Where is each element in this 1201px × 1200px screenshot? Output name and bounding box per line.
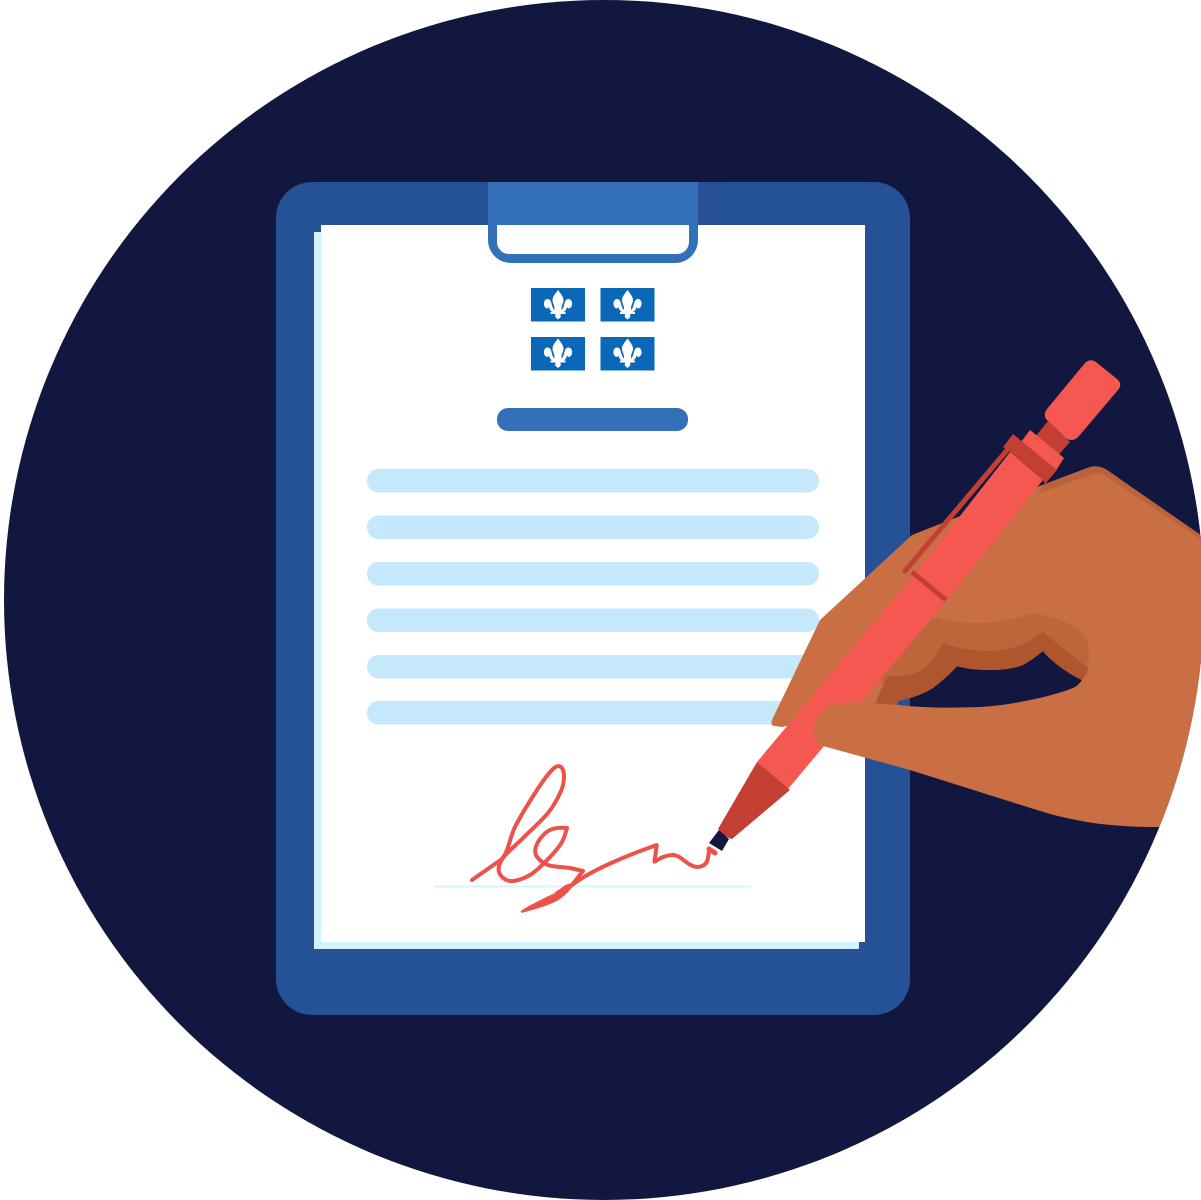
pen collar light band xyxy=(1018,430,1064,472)
document title bar xyxy=(497,408,688,431)
flag quarter top left xyxy=(531,288,585,322)
document text lines xyxy=(367,469,819,724)
pen clip xyxy=(905,449,1008,571)
pen nib xyxy=(709,830,729,851)
signature swoosh xyxy=(522,885,572,912)
signature loops xyxy=(472,766,583,885)
clip xyxy=(488,182,698,263)
signature xyxy=(472,766,715,912)
signature tail xyxy=(572,845,709,885)
clipboard board xyxy=(276,182,910,1015)
flag quarter bottom right xyxy=(600,337,654,370)
back of hand and index finger xyxy=(771,466,1201,727)
flag quarter bottom left xyxy=(531,337,585,370)
knuckle shadow on top of hand xyxy=(1038,466,1201,540)
pen barrel band xyxy=(912,572,946,600)
finger underside shadow xyxy=(874,632,1088,706)
front sheet of paper xyxy=(321,225,865,942)
clip shadow xyxy=(698,182,722,225)
pen xyxy=(709,360,1120,851)
pen neck xyxy=(1035,421,1070,458)
back sheet of paper xyxy=(314,232,859,949)
pen collar dark band xyxy=(1003,434,1057,484)
pen cap button xyxy=(1045,360,1120,440)
pen cone xyxy=(718,762,790,839)
signature end xyxy=(709,849,715,853)
hand xyxy=(771,466,1201,727)
signature baseline xyxy=(434,886,751,888)
clipboard xyxy=(276,182,910,1015)
pen barrel xyxy=(757,452,1043,789)
flag quarter top right xyxy=(600,288,654,322)
signature highlight xyxy=(542,893,555,898)
thumb xyxy=(814,660,1201,828)
middle finger xyxy=(880,613,1089,690)
Quebec flag emblem xyxy=(531,288,654,370)
